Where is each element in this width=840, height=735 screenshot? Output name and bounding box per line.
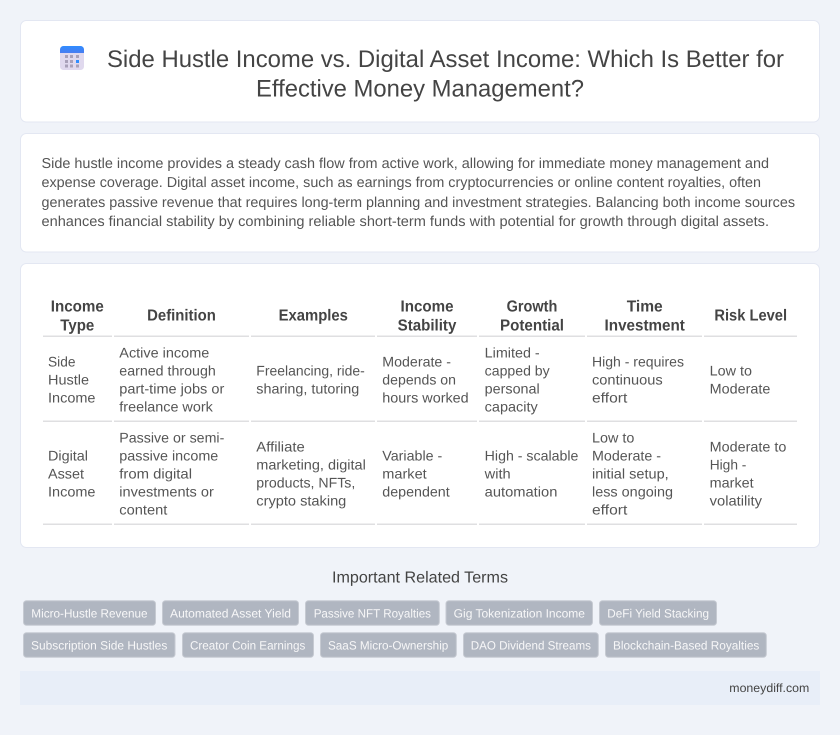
table row: digital asset income: Passive or semi- [119, 430, 225, 446]
table row: digital asset income: products, NFTs, [256, 475, 355, 491]
table row: digital asset income: automation [485, 484, 557, 500]
table row: digital asset income: Low to [592, 430, 635, 446]
table row: digital asset income: volatility [710, 493, 762, 509]
table row: side hustle income: capped by [485, 363, 550, 379]
table row: digital asset income: Income [48, 484, 96, 500]
table header row [51, 299, 787, 335]
table header row: Stability [398, 318, 456, 335]
table row: side hustle income: Low to [710, 363, 752, 379]
table header row: Income [51, 299, 104, 316]
table row: digital asset income: dependent [382, 484, 450, 500]
table header row: Time [627, 299, 663, 316]
table row: side hustle income: continuous [592, 372, 663, 388]
table row: side hustle income: capacity [485, 399, 538, 415]
table row: digital asset income: High - scalable [485, 448, 579, 464]
table row: side hustle income: Side [48, 354, 76, 370]
table header row: Risk Level [714, 308, 787, 325]
table row: digital asset income: Affiliate [256, 439, 305, 455]
table row: side hustle income: Hustle [48, 372, 89, 388]
table row: digital asset income: initial setup, [592, 466, 669, 482]
table row: digital asset income: less ongoing [592, 484, 673, 500]
table row: digital asset income: investments or [119, 484, 214, 500]
panel: related term tags: SaaS Micro-Ownership [328, 638, 449, 652]
table header row: Income [400, 299, 454, 316]
panel: related term tags: Automated Asset Yield [170, 606, 291, 620]
table row: digital asset income: High - [710, 457, 747, 473]
table row: digital asset income: crypto staking [256, 493, 346, 509]
table row: digital asset income: Moderate - [592, 448, 661, 464]
table row: digital asset income: from digital [119, 466, 192, 482]
table row: side hustle income: part-time jobs or [119, 381, 225, 397]
table header row: Examples [279, 308, 348, 325]
table row: side hustle income: effort [592, 390, 627, 406]
table row: side hustle income [48, 345, 771, 415]
table header row: Definition [147, 308, 216, 325]
table row: side hustle income: sharing, tutoring [256, 381, 359, 397]
table header row: Potential [500, 318, 564, 335]
table row: digital asset income: with [484, 466, 511, 482]
title [107, 46, 784, 102]
panel: related term tags: Passive NFT Royalties [314, 606, 431, 620]
title: Side Hustle Income vs. Digital Asset Income: Which Is Better for [107, 46, 784, 73]
panel: related term tags: Creator Coin Earnings [190, 638, 305, 652]
table row: digital asset income: Variable - [382, 448, 443, 464]
title: Effective Money Management? [256, 76, 584, 102]
panel: introduction paragraph: Side hustle income provides a steady cash flow from active work, allowing for immediate money management and [42, 156, 769, 172]
table row: digital asset income [48, 430, 787, 518]
panel: related term tags: Subscription Side Hustles [31, 638, 167, 652]
icon: calendar [60, 46, 84, 70]
table row: side hustle income: Active income [119, 345, 210, 361]
panel: introduction paragraph [20, 134, 820, 252]
table row: side hustle income: Moderate - [382, 354, 451, 370]
table row: digital asset income: content [119, 502, 167, 518]
table row: side hustle income: depends on [382, 372, 456, 388]
panel: related term tags [24, 601, 766, 657]
footer: source [20, 671, 820, 705]
table header row: Investment [605, 318, 685, 335]
table row: side hustle income: personal [485, 381, 540, 397]
table row: digital asset income: passive income [119, 448, 219, 464]
table row: digital asset income: Asset [48, 466, 84, 482]
panel: introduction paragraph: enhances financial stability by combining reliable short-term funds with potential for growth through digital assets. [42, 214, 769, 230]
panel: introduction paragraph: expense coverage. Digital asset income, such as earnings from cryptocurrencies or online content royalties, often [42, 175, 761, 191]
table row: side hustle income: High - requires [592, 354, 684, 370]
panel: related term tags: Blockchain-Based Royalties [613, 638, 759, 652]
table row: side hustle income: Income [48, 390, 96, 406]
panel: comparison table [20, 264, 820, 548]
table row: side hustle income: hours worked [382, 390, 469, 406]
panel: related term tags: DeFi Yield Stacking [607, 606, 709, 620]
table header row: Growth [507, 299, 557, 316]
heading: important related terms: Important Related Terms [332, 570, 508, 587]
panel: introduction paragraph: generates passive revenue that requires long-term planning and investment strategies. Balancing both income sources [42, 195, 795, 211]
table row: side hustle income: freelance work [119, 399, 214, 415]
panel: related term tags: DAO Dividend Streams [471, 638, 591, 652]
table row: digital asset income: effort [592, 502, 627, 518]
table row: digital asset income: Moderate to [710, 439, 787, 455]
footer: source: moneydiff.com [729, 681, 809, 695]
panel: related term tags: Gig Tokenization Income [454, 606, 585, 620]
table row: side hustle income: Moderate [710, 381, 771, 397]
panel: title header [20, 20, 820, 122]
panel: related term tags: Micro-Hustle Revenue [31, 606, 148, 620]
table row: side hustle income: Freelancing, ride- [256, 363, 365, 379]
table header row: Type [60, 318, 94, 335]
table row: digital asset income: Digital [48, 448, 88, 464]
table row: side hustle income: Limited - [485, 345, 540, 361]
table row: side hustle income: earned through [119, 363, 216, 379]
table row: digital asset income: marketing, digital [256, 457, 366, 473]
table row: digital asset income: market [382, 466, 427, 482]
table row: digital asset income: market [710, 475, 754, 491]
